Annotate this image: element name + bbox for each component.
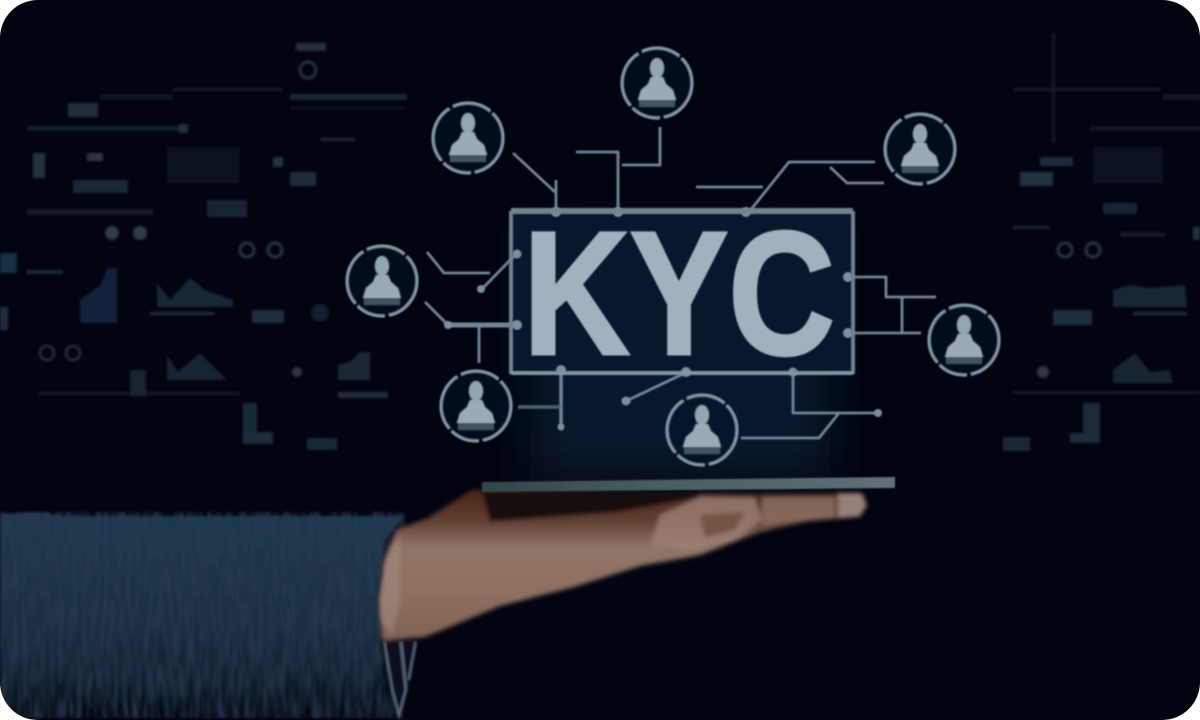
icon: person top-left (433, 103, 503, 173)
hand (378, 490, 867, 641)
icon: person right (929, 305, 999, 375)
KYC heading: KYC (523, 196, 835, 392)
connector nodes (444, 207, 882, 430)
glow behind KYC panel (518, 374, 842, 491)
tablet (482, 477, 895, 492)
icon: person left (347, 246, 417, 316)
icon: person top-right (885, 114, 955, 184)
connector lines (425, 127, 936, 438)
left dashboard graphics (0, 43, 407, 450)
shirt cuff (383, 640, 416, 718)
icon: person bottom-left (441, 371, 511, 441)
sleeve (0, 512, 405, 718)
KYC panel fill (513, 213, 851, 373)
KYC frame (511, 211, 853, 374)
right dashboard graphics (1003, 33, 1200, 451)
icon: person top (622, 48, 692, 118)
icon: person bottom (667, 395, 737, 465)
